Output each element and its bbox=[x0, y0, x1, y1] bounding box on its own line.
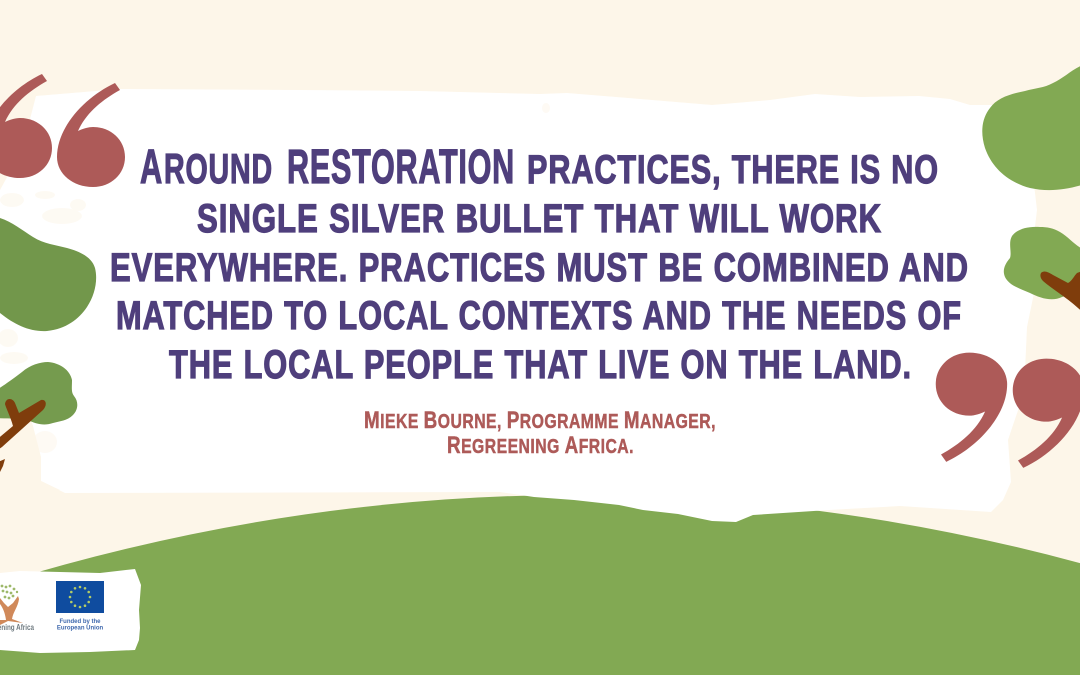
logo panel bbox=[0, 569, 141, 653]
quote text: ROUND bbox=[164, 145, 273, 192]
left tree foliage large bbox=[0, 218, 96, 331]
icon: EU flag bbox=[56, 581, 104, 613]
opening quotation mark bbox=[0, 74, 125, 187]
quote text bbox=[110, 141, 969, 387]
quote text: SINGLE SILVER BULLET THAT WILL WORK bbox=[197, 197, 882, 241]
quote text: RESTORATION bbox=[287, 141, 515, 194]
right tree foliage large bbox=[982, 64, 1080, 190]
quote text: A bbox=[140, 141, 163, 194]
closing quotation mark bbox=[936, 353, 1080, 468]
attribution bbox=[364, 407, 716, 459]
attribution: MIEKE BOURNE, PROGRAMME MANAGER, bbox=[364, 407, 716, 434]
left tree with branch bbox=[0, 362, 77, 472]
quote text: PRACTICES, THERE IS NO bbox=[527, 148, 939, 192]
hill bbox=[0, 495, 1080, 675]
right tree with branch bbox=[1004, 227, 1080, 314]
funding text: Funded by the bbox=[60, 619, 101, 625]
funding text: European Union bbox=[57, 626, 103, 632]
icon: Regreening Africa tree logo bbox=[0, 585, 23, 625]
attribution: REGREENING AFRICA. bbox=[447, 432, 634, 459]
torn paper panel bbox=[0, 89, 1037, 522]
funding text bbox=[57, 619, 103, 632]
